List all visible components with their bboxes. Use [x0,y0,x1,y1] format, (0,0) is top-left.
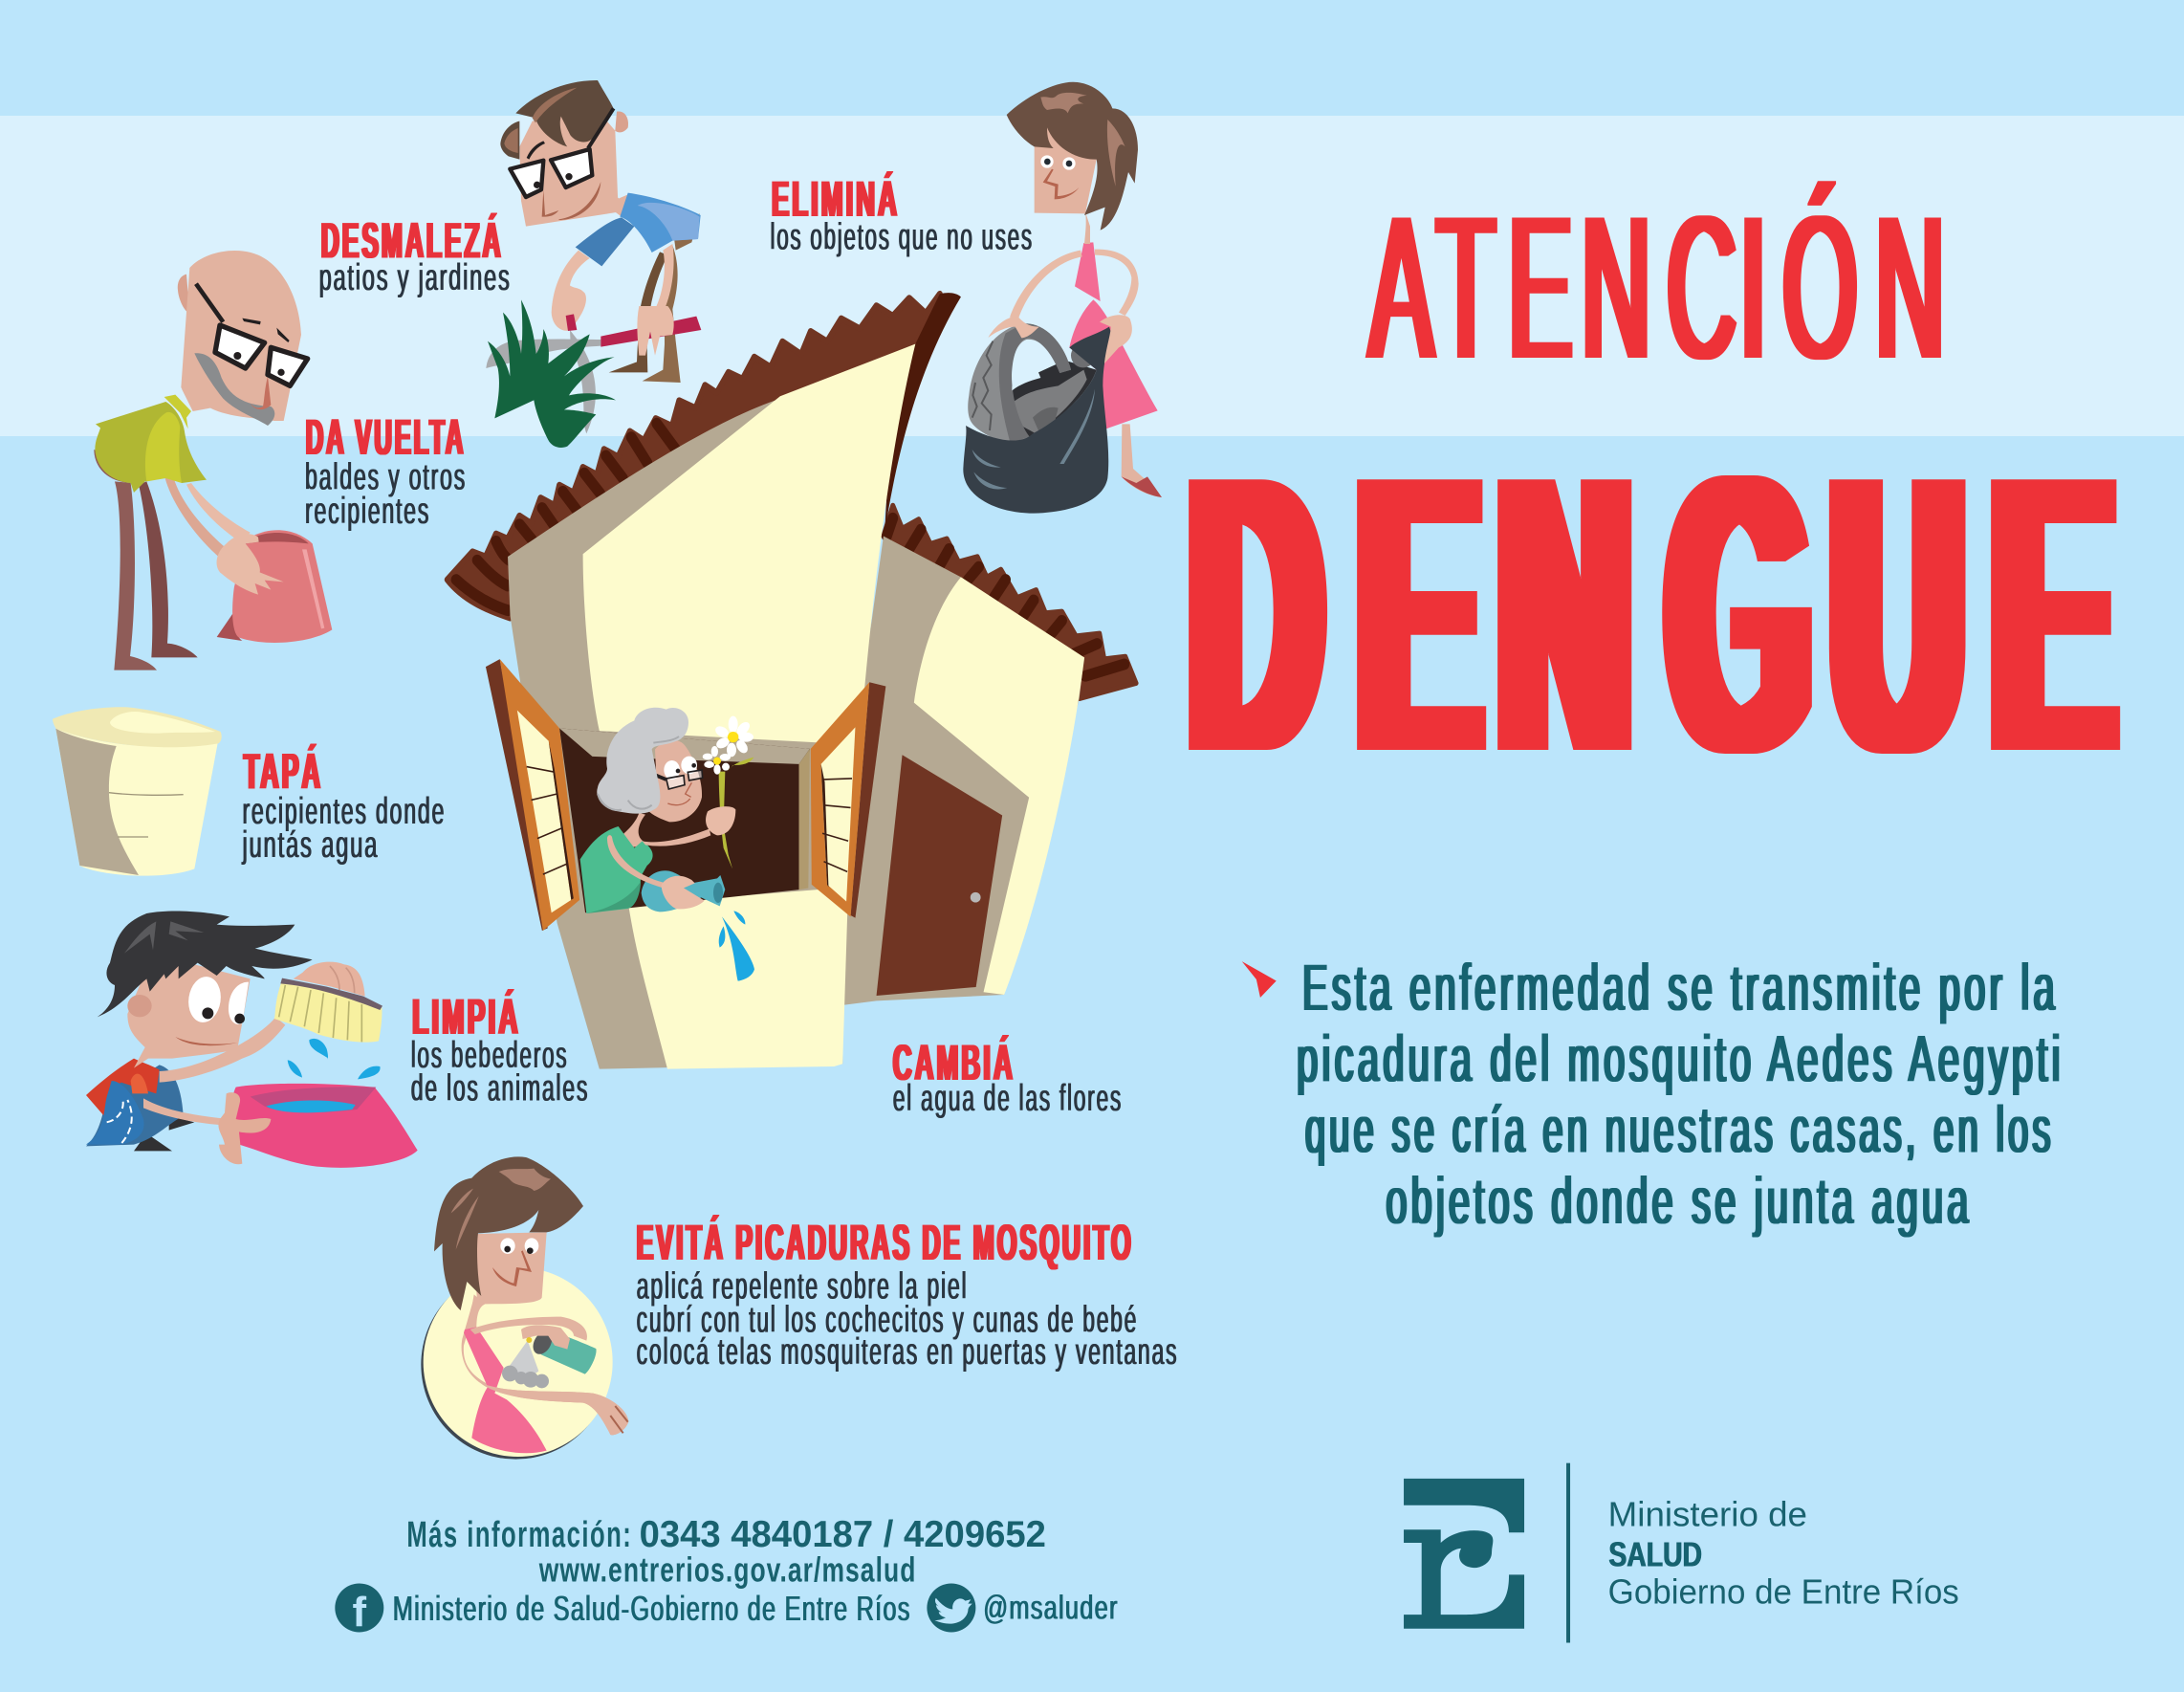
phone line [406,1513,1046,1555]
heading: DESMALEZÁ [321,213,504,269]
illustration: woman applying repellent in a circle [421,1156,628,1460]
text: recipientes [305,490,430,532]
text: juntás agua [242,824,379,866]
illustration: water tank with lid [53,707,222,876]
facebook name: Ministerio de Salud-Gobierno de Entre Ríos [393,1589,911,1628]
illustration: boy cleaning the pet bowl with a brush [86,912,418,1168]
text: colocá telas mosquiteras en puertas y ventanas [637,1330,1178,1373]
right shutter [811,682,885,918]
text: recipientes donde [242,790,446,832]
logo text: SALUD [1608,1534,1702,1573]
step: evitá picaduras de mosquito [637,1216,1178,1373]
icon: red arrow [1242,961,1277,998]
phone line: 0343 4840187 / 4209652 [640,1513,1046,1555]
text: de los animales [411,1067,589,1110]
heading: LIMPIÁ [412,990,521,1045]
flowers [703,716,753,775]
text [305,455,467,532]
logo text [1608,1496,1959,1612]
step: cambiá [893,1036,1123,1119]
water drops [719,911,754,981]
step: tapá [242,744,446,866]
heading: EVITÁ PICADURAS DE MOSQUITO [637,1216,1134,1271]
heading: ELIMINÁ [772,172,900,228]
text [411,1034,589,1110]
illustration: grandmother at the window with flowers and vase [580,708,754,981]
logo mark [1404,1463,1570,1643]
text: los objetos que no uses [771,216,1034,258]
door [877,755,1002,996]
text: aplicá repelente sobre la piel [637,1265,968,1307]
text [637,1265,1178,1373]
text [242,790,446,866]
phone line: Más información: [406,1515,632,1555]
icon: facebook [335,1583,383,1636]
step: da vuelta [305,410,467,532]
title: dengue: DENGUE [1190,393,2113,833]
illustration: man cutting weeds with shears [486,80,701,448]
logo: ministerio de salud [1404,1463,1959,1643]
website: www.entrerios.gov.ar/msalud [538,1549,916,1589]
text: baldes y otros [305,455,467,497]
walls [508,344,1084,1069]
text: los bebederos [411,1034,568,1076]
text: cubrí con tul los cochecitos y cunas de bebé [637,1299,1138,1341]
logo text: Gobierno de Entre Ríos [1608,1573,1959,1612]
icon: twitter [927,1583,975,1632]
text: DA VUELTA [306,410,466,466]
right roof [884,505,1136,698]
footer: contact information [335,1513,1119,1636]
step: limpiá [411,990,589,1110]
illustration: house [448,293,1136,1069]
illustration: woman with garbage bag of tires [963,82,1162,514]
twitter handle: @msaluder [983,1590,1119,1627]
heading: CAMBIÁ [893,1036,1016,1091]
icon: facebook: f [353,1589,367,1636]
main roof [448,293,961,618]
illustration: man turning a bucket upside down [94,251,332,670]
logo text: Ministerio de [1608,1496,1807,1534]
step: eliminá [771,172,1034,258]
text block: description [1297,951,2064,1238]
window opening [559,728,810,912]
title: atención: ATENCIÓN [1369,174,1945,402]
text: el agua de las flores [893,1077,1123,1119]
left shutter [486,659,579,931]
heading: TAPÁ [244,744,323,800]
text: patios y jardines [319,256,512,298]
step: desmalezá [319,213,512,298]
